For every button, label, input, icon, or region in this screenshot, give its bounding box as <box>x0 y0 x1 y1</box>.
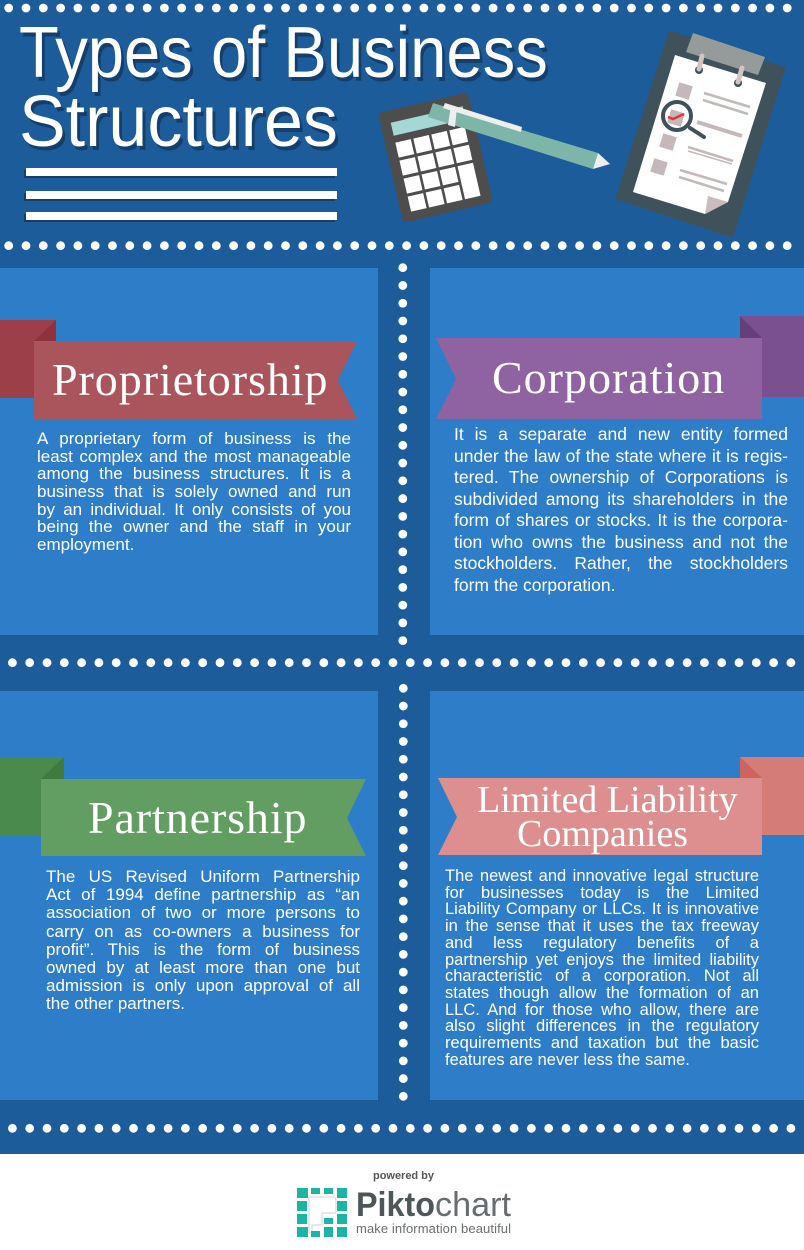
text: Corporation description: stockholders. Rather, the stockholders <box>454 553 788 573</box>
text: Proprietorship description: employment. <box>37 535 134 554</box>
text: Limited Liability Companies description <box>445 867 759 1069</box>
title underline bars <box>24 168 337 222</box>
text: Partnership description: The US Revised Uniform Partnership <box>46 867 360 886</box>
text: Limited Liability Companies description: requirements and taxation but the basic <box>445 1034 759 1052</box>
text: Partnership description: the other partners. <box>46 994 185 1013</box>
text: Proprietorship description: A proprietary form of business is the <box>37 429 351 448</box>
text: Corporation description: under the law of the state where it is regis- <box>454 446 788 466</box>
text: Limited Liability Companies description: partnership yet enjoys the limited liability <box>445 951 759 969</box>
ribbon: Proprietorship: Proprietorship <box>52 354 328 405</box>
text: Limited Liability Companies description: and less regulatory benefits of a <box>445 934 759 952</box>
text: Partnership description: carry on as co-owners a business for <box>46 922 360 941</box>
text: Limited Liability Companies description: LLC. And for those who allow, there are <box>445 1001 759 1019</box>
icon: pen <box>428 103 610 169</box>
text: Corporation description: It is a separate and new entity formed <box>454 424 788 444</box>
title <box>19 13 548 162</box>
title: Types of Business <box>19 13 548 93</box>
text: Proprietorship description: being the owner and the staff in your <box>37 517 351 536</box>
text: Limited Liability Companies description: states though allow the formation of an <box>445 984 759 1002</box>
footer: Piktochart wordmark: Pikto <box>356 1186 435 1224</box>
icon: calculator <box>378 92 493 223</box>
ribbon: Partnership: Partnership <box>88 792 307 843</box>
footer: Piktochart wordmark <box>356 1186 512 1236</box>
text: Limited Liability Companies description: characteristic of a corporation. Not all <box>445 967 759 985</box>
ribbon: Limited Liability Companies: Limited Liability <box>477 779 738 821</box>
text: Corporation description: tion who owns the business and not the <box>454 532 788 552</box>
text: Limited Liability Companies description: features are never less the same. <box>445 1051 690 1069</box>
ribbon: Limited Liability Companies <box>438 757 804 855</box>
text: Partnership description: owned by at least more than one but <box>46 958 360 977</box>
footer: Piktochart wordmark: chart <box>435 1186 512 1224</box>
text: Partnership description <box>46 867 360 1013</box>
text: Proprietorship description: least complex and the most manageable <box>37 447 351 466</box>
text: Partnership description: profit”. This is the form of business <box>46 940 360 959</box>
footer: Piktochart wordmark: make information beautiful <box>356 1221 511 1236</box>
ribbon: Corporation <box>436 316 804 419</box>
text: Proprietorship description: by an individual. It only consists of you <box>37 500 351 519</box>
text: Partnership description: association of two or more persons to <box>46 903 360 922</box>
text: Partnership description: Act of 1994 define partnership as “an <box>46 885 360 904</box>
text: Corporation description: form the corporation. <box>454 575 615 595</box>
icon: clipboard <box>617 32 784 236</box>
text: Proprietorship description: business that is solely owned and run <box>37 482 351 501</box>
text: Proprietorship description <box>37 429 351 554</box>
ribbon: Partnership <box>0 757 366 856</box>
ribbon: Corporation: Corporation <box>492 352 725 403</box>
text: Corporation description: subdivided among its shareholders in the <box>454 489 788 509</box>
text: Corporation description: form of shares or stocks. It is the corpora- <box>454 510 788 530</box>
text: Partnership description: admission is only upon approval of all <box>46 976 360 995</box>
footer logo: Piktochart mark <box>297 1188 347 1237</box>
title: Structures <box>19 82 338 162</box>
footer: powered by: powered by <box>373 1170 435 1182</box>
text: Limited Liability Companies description: for businesses today is the Limited <box>445 884 759 902</box>
text: Corporation description: tered. The ownership of Corporations is <box>454 467 788 487</box>
text: Limited Liability Companies description: in the sense that it uses the tax freeway <box>445 917 759 935</box>
text: Limited Liability Companies description: Liability Company or LLCs. It is innovative <box>445 900 759 918</box>
ribbon: Proprietorship <box>0 320 357 419</box>
text: Limited Liability Companies description: also slight differences in the regulatory <box>445 1017 759 1035</box>
text: Proprietorship description: among the business structures. It is a <box>37 464 351 483</box>
text: Corporation description <box>454 424 788 595</box>
ribbon: Limited Liability Companies: Companies <box>517 813 688 855</box>
text: Limited Liability Companies description: The newest and innovative legal structure <box>445 867 759 885</box>
